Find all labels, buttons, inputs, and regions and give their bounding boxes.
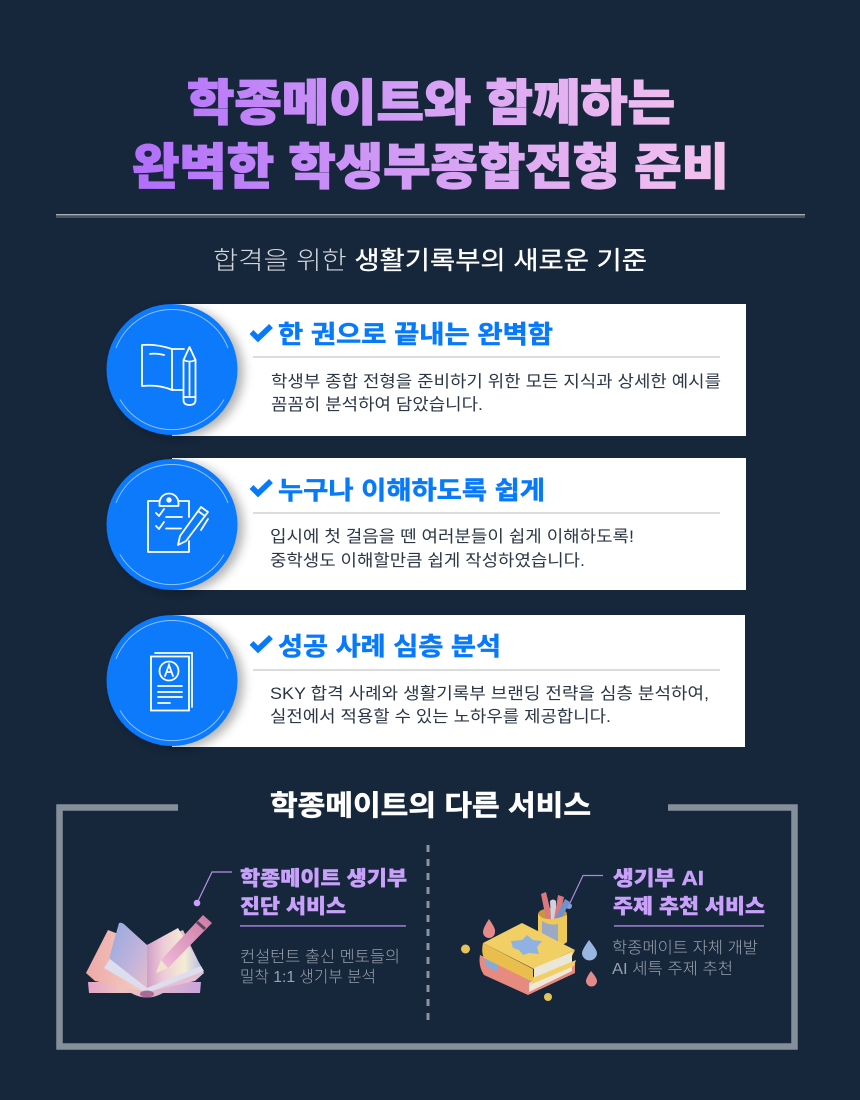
body text 2 bbox=[270, 527, 634, 570]
service title left: 학종메이트 생기부 bbox=[240, 867, 407, 890]
service rule right bbox=[614, 925, 764, 927]
icon: book and pencil bbox=[142, 345, 196, 405]
title: 완벽한 학생부종합전형 준비 bbox=[132, 141, 729, 195]
panel: feature 1 bbox=[106, 304, 746, 436]
service title left: 진단 서비스 bbox=[240, 895, 346, 918]
leader line right bbox=[566, 876, 603, 909]
body text 3: SKY 합격 사례와 생활기록부 브랜딩 전략을 심층 분석하여, bbox=[270, 684, 709, 703]
service title right bbox=[613, 867, 765, 918]
body text 2: 중학생도 이해할만큼 쉽게 작성하였습니다. bbox=[270, 551, 585, 570]
title divider bbox=[56, 214, 805, 218]
service title left bbox=[240, 867, 407, 918]
service description right: 학종메이트 자체 개발 bbox=[612, 939, 758, 957]
leader line left bbox=[194, 872, 232, 906]
divider 3 bbox=[253, 669, 720, 671]
service: AI topic bbox=[461, 867, 765, 1001]
body text 3: 실전에서 적용할 수 있는 노하우를 제공합니다. bbox=[270, 707, 611, 726]
subtitle: 합격을 위한 생활기록부의 새로운 기준 bbox=[213, 247, 647, 275]
circle badge 2 bbox=[106, 459, 238, 590]
services heading: 학종메이트의 다른 서비스 bbox=[270, 790, 591, 821]
service description right: AI 세특 주제 추천 bbox=[612, 960, 733, 978]
circle badge 1 bbox=[106, 304, 238, 435]
card 2 background bbox=[172, 458, 746, 590]
title bbox=[132, 77, 729, 195]
body text 2: 입시에 첫 걸음을 뗀 여러분들이 쉽게 이해하도록! bbox=[270, 527, 634, 546]
panel: other services bbox=[60, 790, 794, 1046]
services frame bbox=[60, 808, 794, 1046]
body text 3 bbox=[270, 684, 709, 726]
icon: check mark 3 bbox=[252, 637, 271, 650]
divider 1 bbox=[253, 356, 720, 358]
service description left bbox=[240, 948, 400, 986]
service title right: 주제 추천 서비스 bbox=[613, 895, 765, 918]
title: 학종메이트와 함께하는 bbox=[187, 77, 675, 131]
service description right bbox=[612, 939, 758, 978]
icon: clipboard and pen bbox=[148, 494, 208, 552]
service description left: 컨설턴트 출신 멘토들의 bbox=[240, 948, 400, 966]
illustration: stacked books with pencil cup bbox=[461, 892, 597, 1001]
card 3 background bbox=[172, 615, 745, 747]
card 1 background bbox=[172, 304, 746, 436]
icon: check mark 1 bbox=[252, 326, 271, 338]
panel: feature 3 bbox=[106, 615, 745, 747]
heading 3: 성공 사례 심층 분석 bbox=[278, 633, 501, 661]
service title right: 생기부 AI bbox=[613, 867, 704, 890]
service description left: 밀착 1:1 생기부 분석 bbox=[240, 968, 376, 986]
body text 1: 학생부 종합 전형을 준비하기 위한 모든 지식과 상세한 예시를 bbox=[271, 372, 721, 391]
center dashed divider bbox=[426, 845, 430, 1022]
service rule left bbox=[240, 925, 406, 927]
panel: feature 2 bbox=[106, 458, 746, 590]
body text 1: 꼼꼼히 분석하여 담았습니다. bbox=[271, 395, 483, 414]
icon: graded document bbox=[151, 653, 192, 710]
service: diagnosis bbox=[86, 867, 407, 998]
heading 2: 누구나 이해하도록 쉽게 bbox=[278, 477, 545, 505]
body text 1 bbox=[271, 372, 721, 414]
circle badge 3 bbox=[106, 615, 238, 746]
illustration: open book with pencil bbox=[86, 915, 212, 998]
heading 1: 한 권으로 끝내는 완벽함 bbox=[278, 321, 553, 349]
icon: check mark 2 bbox=[252, 481, 271, 494]
divider 2 bbox=[253, 512, 720, 514]
